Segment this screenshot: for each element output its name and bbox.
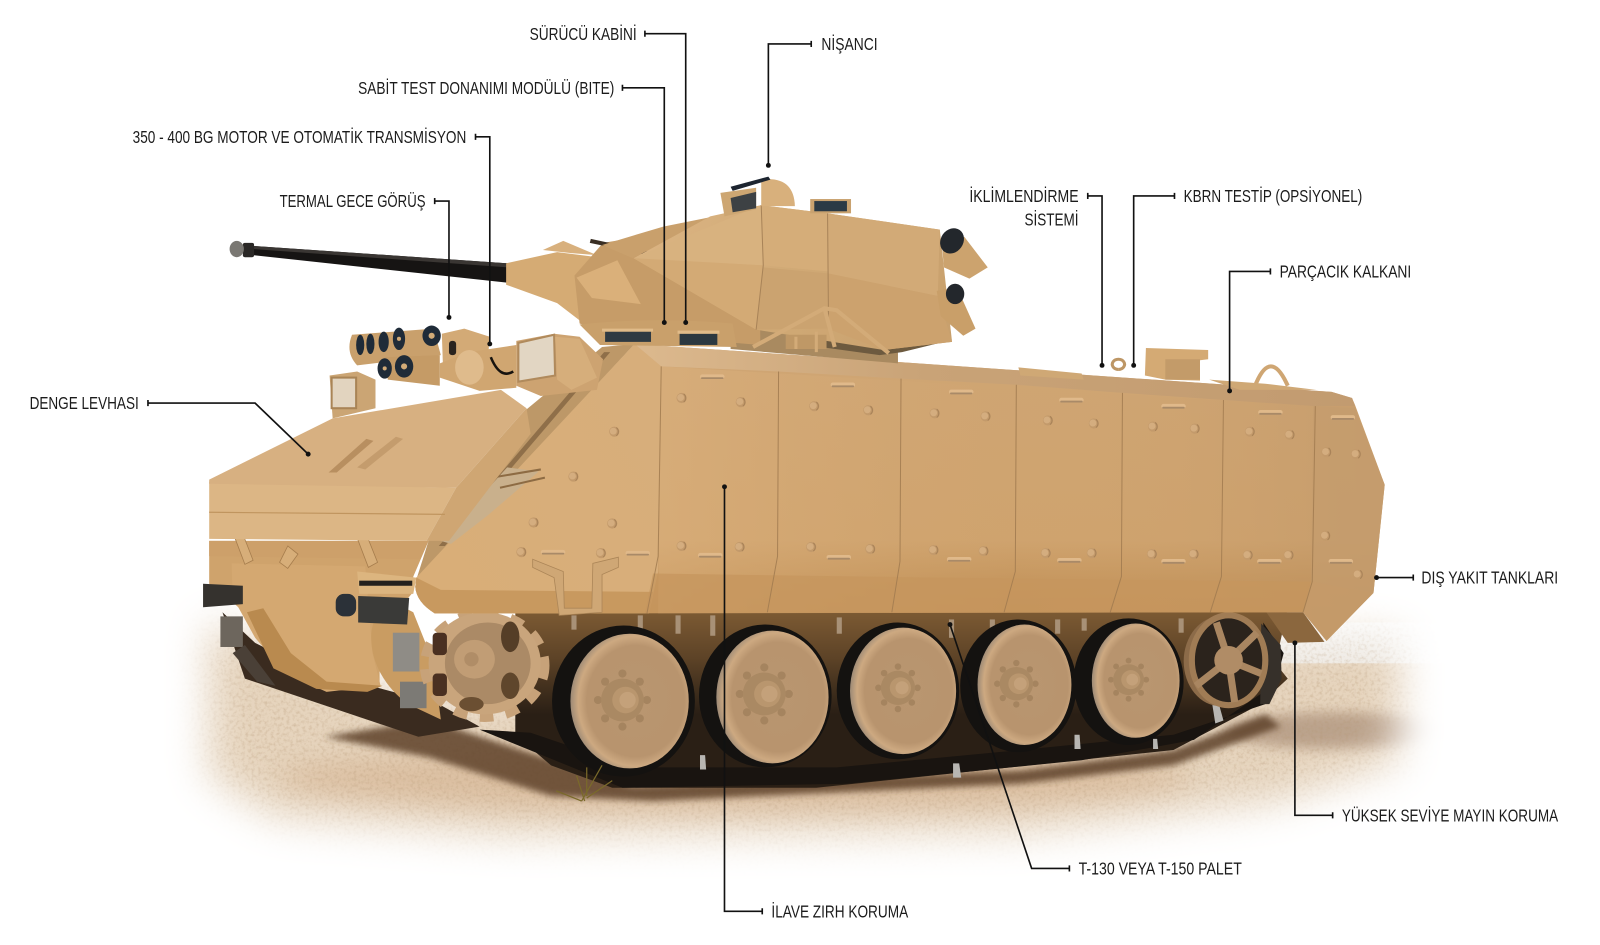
label: denge levhası <box>30 393 311 457</box>
text: İLAVE ZIRH KORUMA <box>771 901 909 921</box>
fill behind roof rack <box>731 325 898 363</box>
road wheel 3 <box>837 622 959 759</box>
text: 350 - 400 BG MOTOR VE OTOMATİK TRANSMİSYON <box>133 127 466 147</box>
leader line <box>950 625 1069 871</box>
smoke dischargers <box>935 224 988 336</box>
sprocket wheel <box>427 612 543 715</box>
text: TERMAL GECE GÖRÜŞ <box>280 191 426 211</box>
hinges <box>231 521 378 568</box>
left headlamp <box>330 371 376 418</box>
tow bracket <box>533 557 618 615</box>
hand rail <box>492 469 545 488</box>
label: ilave zırh koruma <box>722 484 909 921</box>
idler wheel <box>1184 615 1265 706</box>
road wheel 1 <box>552 626 695 777</box>
leader line <box>1088 193 1102 365</box>
text: DIŞ YAKIT TANKLARI <box>1421 568 1558 588</box>
vehicle <box>203 177 1385 801</box>
label: yüksek seviye mayın koruma <box>1292 640 1559 825</box>
label: t-130 veya t-150 palet <box>948 622 1242 879</box>
roof rack <box>753 308 889 353</box>
smoke launchers <box>349 329 441 365</box>
leader line <box>1377 575 1413 581</box>
panel seams <box>647 366 1315 613</box>
label: kbrn testip <box>1131 186 1362 368</box>
front deck equipment <box>330 326 603 418</box>
road wheel 5 <box>1073 618 1184 745</box>
underside <box>806 329 952 355</box>
label: termal gece görüş <box>280 191 451 320</box>
text: SABİT TEST DONANIMI MODÜLÜ (BITE) <box>358 78 614 98</box>
sand surface <box>186 610 1422 858</box>
thermal sight <box>442 329 490 363</box>
leader line <box>622 85 664 322</box>
leader line <box>645 31 686 322</box>
text: SÜRÜCÜ KABİNİ <box>530 24 637 44</box>
label: motor ve transmisyon <box>133 127 492 346</box>
leader line <box>1230 268 1270 391</box>
undercarriage shadow and track <box>480 608 1324 788</box>
trim vane and glacis gap <box>416 344 635 580</box>
main turret body <box>634 205 952 350</box>
label: iklimlendirme sistemi: SİSTEMİ <box>1024 210 1079 230</box>
turret <box>506 177 988 363</box>
front lower hull <box>209 521 441 719</box>
text: PARÇACIK KALKANI <box>1280 262 1411 282</box>
main armour shape <box>415 344 1385 641</box>
commander sight <box>761 179 795 206</box>
leader line <box>1134 193 1174 365</box>
label: nişancı <box>766 34 878 168</box>
text: DENGE LEVHASI <box>30 393 139 413</box>
label: iklimlendirme sistemi <box>969 186 1104 368</box>
leader line <box>724 487 762 914</box>
leader line <box>1295 643 1333 818</box>
bolts <box>516 374 1363 580</box>
label: parçacık kalkanı <box>1227 262 1411 393</box>
leader line <box>435 198 449 317</box>
driver hatches ring <box>580 320 737 347</box>
gun barrel <box>230 241 508 283</box>
mantlet cone <box>506 252 612 324</box>
roof band <box>635 344 1355 406</box>
hull side armour <box>415 344 1385 641</box>
text: KBRN TESTİP (OPSİYONEL) <box>1184 186 1362 206</box>
leader line <box>148 400 308 454</box>
rear sight window <box>810 199 851 213</box>
small plant <box>556 765 612 801</box>
roof equipment <box>1018 348 1316 390</box>
label: sabit test donanımı modülü <box>358 78 667 325</box>
text: İKLİMLENDİRME <box>969 186 1079 206</box>
label: sürücü kabini <box>530 24 688 325</box>
mantlet box <box>574 235 760 345</box>
lower chamfer <box>645 574 1373 641</box>
ground under the vehicle <box>184 608 1426 860</box>
vehicle cast shadow <box>324 714 1281 801</box>
label: dış yakıt tankları <box>1374 568 1558 588</box>
far-side track and lower front <box>220 612 480 737</box>
trim vane <box>209 390 531 541</box>
leader line <box>476 134 490 344</box>
leader line <box>768 41 811 165</box>
drum <box>371 606 441 719</box>
front sloped face <box>415 344 661 613</box>
rubber bumpers <box>203 581 427 708</box>
text: NİŞANCI <box>821 34 878 54</box>
road wheel 4 <box>960 619 1077 752</box>
road wheel 2 <box>699 625 832 767</box>
text: T-130 VEYA T-150 PALET <box>1079 859 1242 879</box>
right headlamp <box>516 334 603 396</box>
